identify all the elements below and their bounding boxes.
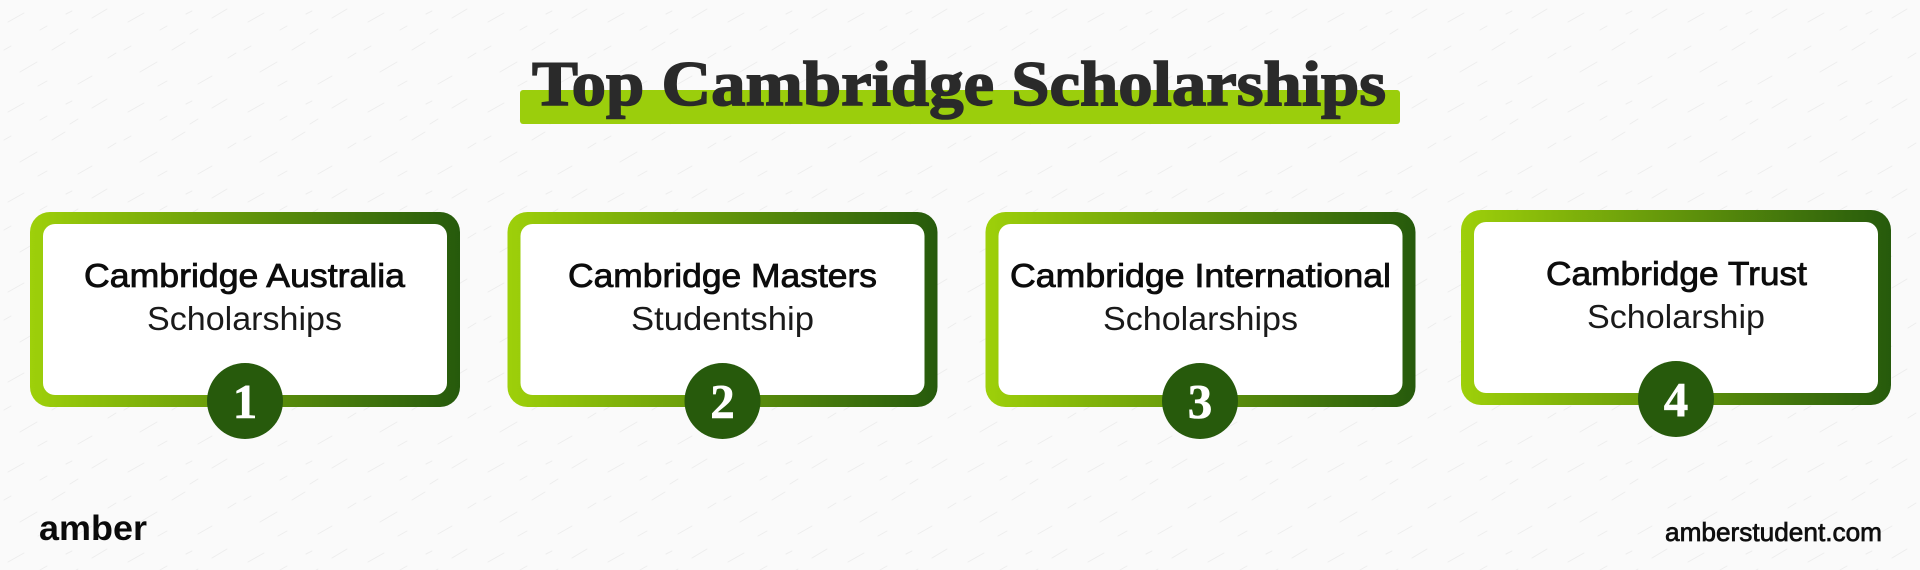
card 1: Cambridge Australia Scholarships (30, 212, 460, 439)
card 4: Cambridge Trust Scholarship: 4 (1664, 372, 1688, 427)
card 2: Cambridge Masters Studentship (508, 212, 938, 439)
card 1: Cambridge Australia Scholarships: 1 (233, 374, 257, 429)
card 3: Cambridge International Scholarships: Cambridge International (1010, 257, 1391, 294)
card 3: Cambridge International Scholarships: Scholarships (1103, 300, 1298, 337)
card 2: Cambridge Masters Studentship: Cambridge Masters (568, 257, 877, 294)
card 3: Cambridge International Scholarships (986, 212, 1416, 439)
card 4: Cambridge Trust Scholarship: Cambridge Trust (1546, 255, 1807, 292)
card 1: Cambridge Australia Scholarships: Scholarships (147, 300, 342, 337)
card 2: Cambridge Masters Studentship: 2 (710, 374, 735, 429)
title with green highlight: Top Cambridge Scholarships (532, 49, 1386, 119)
logo: amber: amber (39, 509, 147, 548)
card 2: Cambridge Masters Studentship: Studentship (631, 300, 814, 337)
card 3: Cambridge International Scholarships: 3 (1188, 374, 1212, 429)
card 4: Cambridge Trust Scholarship: Scholarship (1587, 298, 1765, 335)
website: amberstudent.com: amberstudent.com (1665, 517, 1882, 547)
card 1: Cambridge Australia Scholarships: Cambridge Australia (84, 257, 406, 294)
card 4: Cambridge Trust Scholarship (1461, 210, 1891, 437)
